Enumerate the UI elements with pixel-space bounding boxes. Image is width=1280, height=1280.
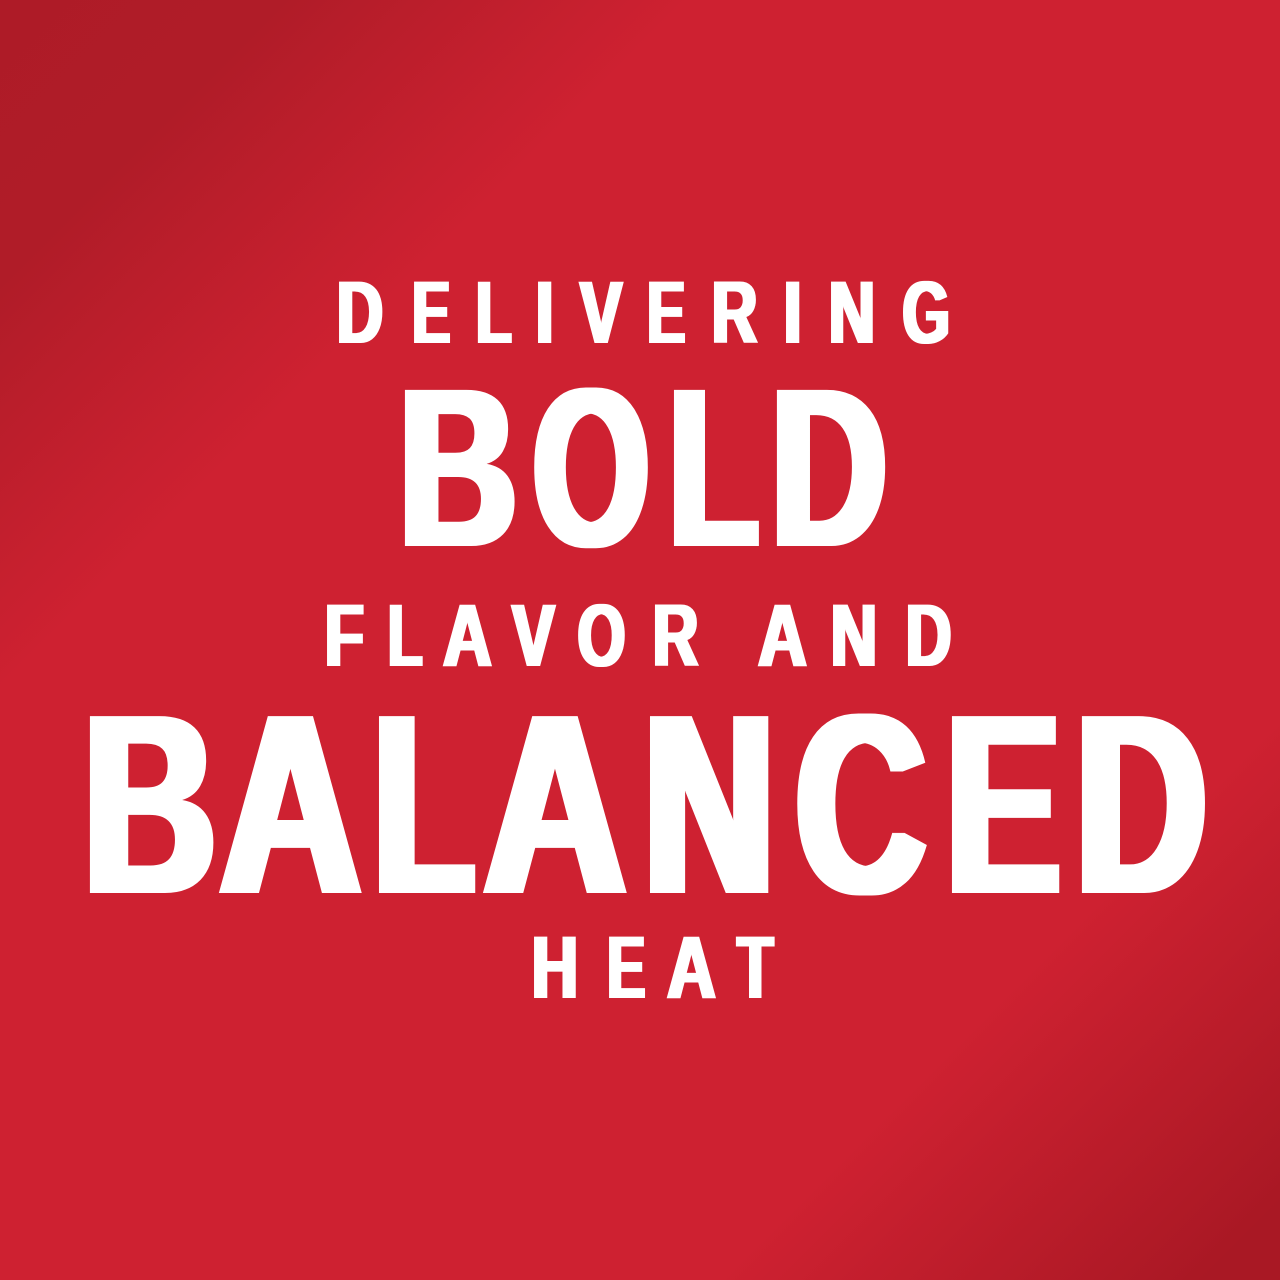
heading line: DELIVERING: I	[536, 262, 554, 362]
heading line: DELIVERING: I	[784, 262, 802, 362]
heading line: FLAVOR AND: A	[443, 585, 492, 685]
heading line: DELIVERING: E	[412, 262, 450, 362]
heading line: BOLD: O	[533, 342, 649, 595]
heading line: DELIVERING: L	[476, 262, 512, 362]
heading line: HEAT: T	[737, 917, 773, 1017]
heading line: FLAVOR AND: N	[831, 585, 877, 685]
heading line: HEAT: E	[607, 917, 645, 1017]
heading line: BALANCED: N	[644, 661, 774, 948]
heading line: BALANCED: C	[796, 661, 926, 948]
heading line: BALANCED: L	[374, 661, 474, 948]
heading line: DELIVERING: G	[902, 262, 950, 362]
heading line: BOLD: B	[399, 342, 517, 595]
heading line: HEAT: H	[532, 917, 578, 1017]
heading line: FLAVOR AND: O	[578, 585, 625, 685]
heading line: BOLD: D	[771, 342, 887, 595]
heading line: DELIVERING: E	[647, 262, 685, 362]
heading line: DELIVERING: N	[829, 262, 875, 362]
heading line: FLAVOR AND: L	[388, 585, 422, 685]
heading line: BOLD: L	[669, 342, 758, 595]
heading line: DELIVERING: R	[712, 262, 757, 362]
heading line: DELIVERING	[337, 262, 950, 362]
heading line: FLAVOR AND: D	[906, 585, 951, 685]
heading line: BALANCED: E	[947, 661, 1060, 948]
heading line: HEAT	[532, 917, 773, 1017]
heading line: BALANCED: A	[484, 661, 626, 948]
heading line: BALANCED: B	[84, 661, 216, 948]
heading line: FLAVOR AND: V	[512, 585, 555, 685]
heading line: FLAVOR AND	[325, 585, 951, 685]
heading line: BALANCED: A	[220, 661, 361, 948]
heading line: HEAT: A	[667, 917, 716, 1017]
heading line: FLAVOR AND: A	[758, 585, 807, 685]
heading line: BALANCED: D	[1076, 661, 1207, 948]
heading line: FLAVOR AND: F	[325, 585, 364, 685]
heading line: DELIVERING: V	[580, 262, 622, 362]
heading line: FLAVOR AND: R	[653, 585, 698, 685]
heading line: BALANCED	[84, 661, 1207, 948]
heading line: DELIVERING: D	[337, 262, 383, 362]
heading line: BOLD	[399, 342, 887, 595]
